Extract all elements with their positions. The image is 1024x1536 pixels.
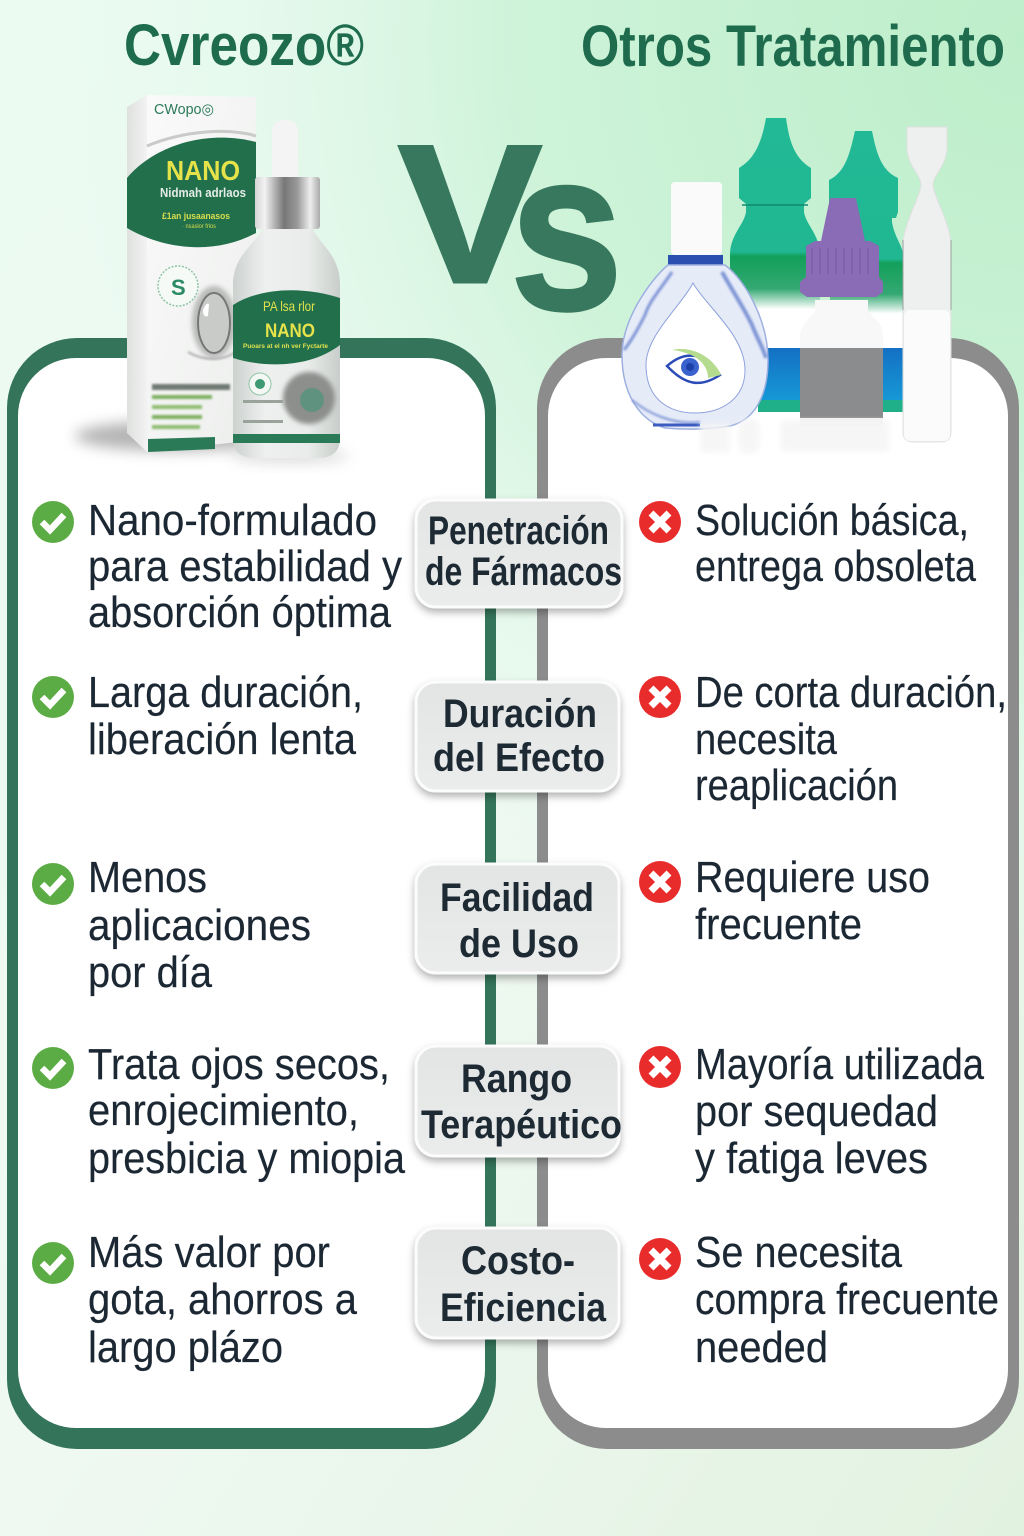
text: therapeutic range drawback: y fatiga leves [695,1134,928,1183]
text: penetration benefit: Nano-formulado [88,496,377,545]
text: ease of use drawback: frecuente [695,900,862,949]
icon: ampoule [903,127,951,442]
text: duration benefit: liberación lenta [88,715,356,764]
label: Penetración de Fármacos: de Fármacos [425,550,622,594]
text: penetration drawback [695,496,976,591]
label: Costo-Eficiencia [416,1228,619,1338]
text: ease of use benefit: aplicaciones [88,901,311,950]
text: penetration drawback: Solución básica, [695,496,969,545]
icon: dropper bottle [233,120,340,458]
icon: green bottle rear [829,131,905,412]
text: ease of use benefit: Menos [88,853,207,902]
text: ease of use drawback: Requiere uso [695,853,930,902]
product: Nano box and bottle [75,95,350,462]
icon: box: £1an jusaanasos [162,211,230,221]
text: penetration benefit: absorción óptima [88,588,391,637]
label: Penetración de Fármacos [416,500,622,607]
text: cost benefit: largo plázo [88,1323,283,1372]
product: other eye drops [622,118,951,454]
text: ease of use benefit [88,853,311,997]
text: therapeutic range drawback: Mayoría utilizada [695,1040,984,1089]
icon: box: · nsaslor frlos [182,224,216,230]
icon: box [127,95,256,452]
panel: Cvreozo [7,338,496,1449]
label: Duración del Efecto [416,682,619,791]
panel: Otros Tratamiento [537,338,1019,1449]
icon: dropper bottle: Puoars at el nh ver Fyctarte [243,343,328,350]
label: Facilidad de Uso: Facilidad [440,876,594,920]
icon: box: Nidmah adrlaos [160,185,246,200]
label: Penetración de Fármacos: Penetración [428,509,609,553]
text: duration benefit [88,668,363,764]
text: penetration drawback: entrega obsoleta [695,542,976,591]
VS mark [398,104,623,358]
label: Rango Terapéutico: Rango [461,1057,572,1101]
labels connecting column [416,500,622,1338]
VS mark: V [398,104,542,324]
heading: Cvreozo: Cvreozo® [124,13,364,78]
icon: dropper bottle: NANO [265,321,315,342]
text: penetration benefit [88,496,402,637]
icon: dropper bottle: PA lsa rlor [263,298,315,314]
text: duration drawback: reaplicación [695,761,898,810]
text: cost drawback: Se necesita [695,1228,902,1277]
icon: vials [700,418,890,454]
label: Facilidad de Uso: de Uso [459,922,579,966]
text: cost benefit [88,1228,357,1372]
VS mark: s [510,104,623,358]
label: Rango Terapéutico [416,1046,622,1156]
text: cost drawback [695,1228,999,1372]
icon: box: NANO [166,155,240,186]
check icons [32,501,74,1284]
text: therapeutic range benefit: presbicia y miopia [88,1134,405,1183]
label: Costo-Eficiencia: Eficiencia [440,1286,607,1330]
text: ease of use benefit: por día [88,948,212,997]
text: duration drawback: necesita [695,715,837,764]
text: therapeutic range benefit [88,1040,405,1183]
text: ease of use drawback [695,853,930,949]
text: therapeutic range drawback [695,1040,984,1183]
icon: box: CWopo◎ [154,101,214,118]
text: therapeutic range benefit: Trata ojos secos, [88,1040,390,1089]
text: cost benefit: Más valor por [88,1228,330,1277]
text: penetration benefit: para estabilidad y [88,542,402,591]
text: therapeutic range benefit: enrojecimiento, [88,1086,359,1135]
text: therapeutic range drawback: por sequedad [695,1087,938,1136]
icon: eye drop bottle [622,182,768,429]
icon: box: S [171,275,186,300]
label: Rango Terapéutico: Terapéutico [421,1103,622,1147]
cross icons [639,501,681,1280]
text: cost benefit: gota, ahorros a [88,1275,357,1324]
icon: green bottle front [730,118,824,412]
label: Duración del Efecto: Duración [443,692,597,736]
label: Duración del Efecto: del Efecto [433,736,605,780]
icon: purple bottle [800,198,883,426]
text: duration drawback [695,668,1007,810]
label: Facilidad de Uso [416,864,619,973]
text: cost drawback: needed [695,1323,828,1372]
label: Costo-Eficiencia: Costo- [461,1239,575,1283]
text: duration benefit: Larga duración, [88,668,363,717]
